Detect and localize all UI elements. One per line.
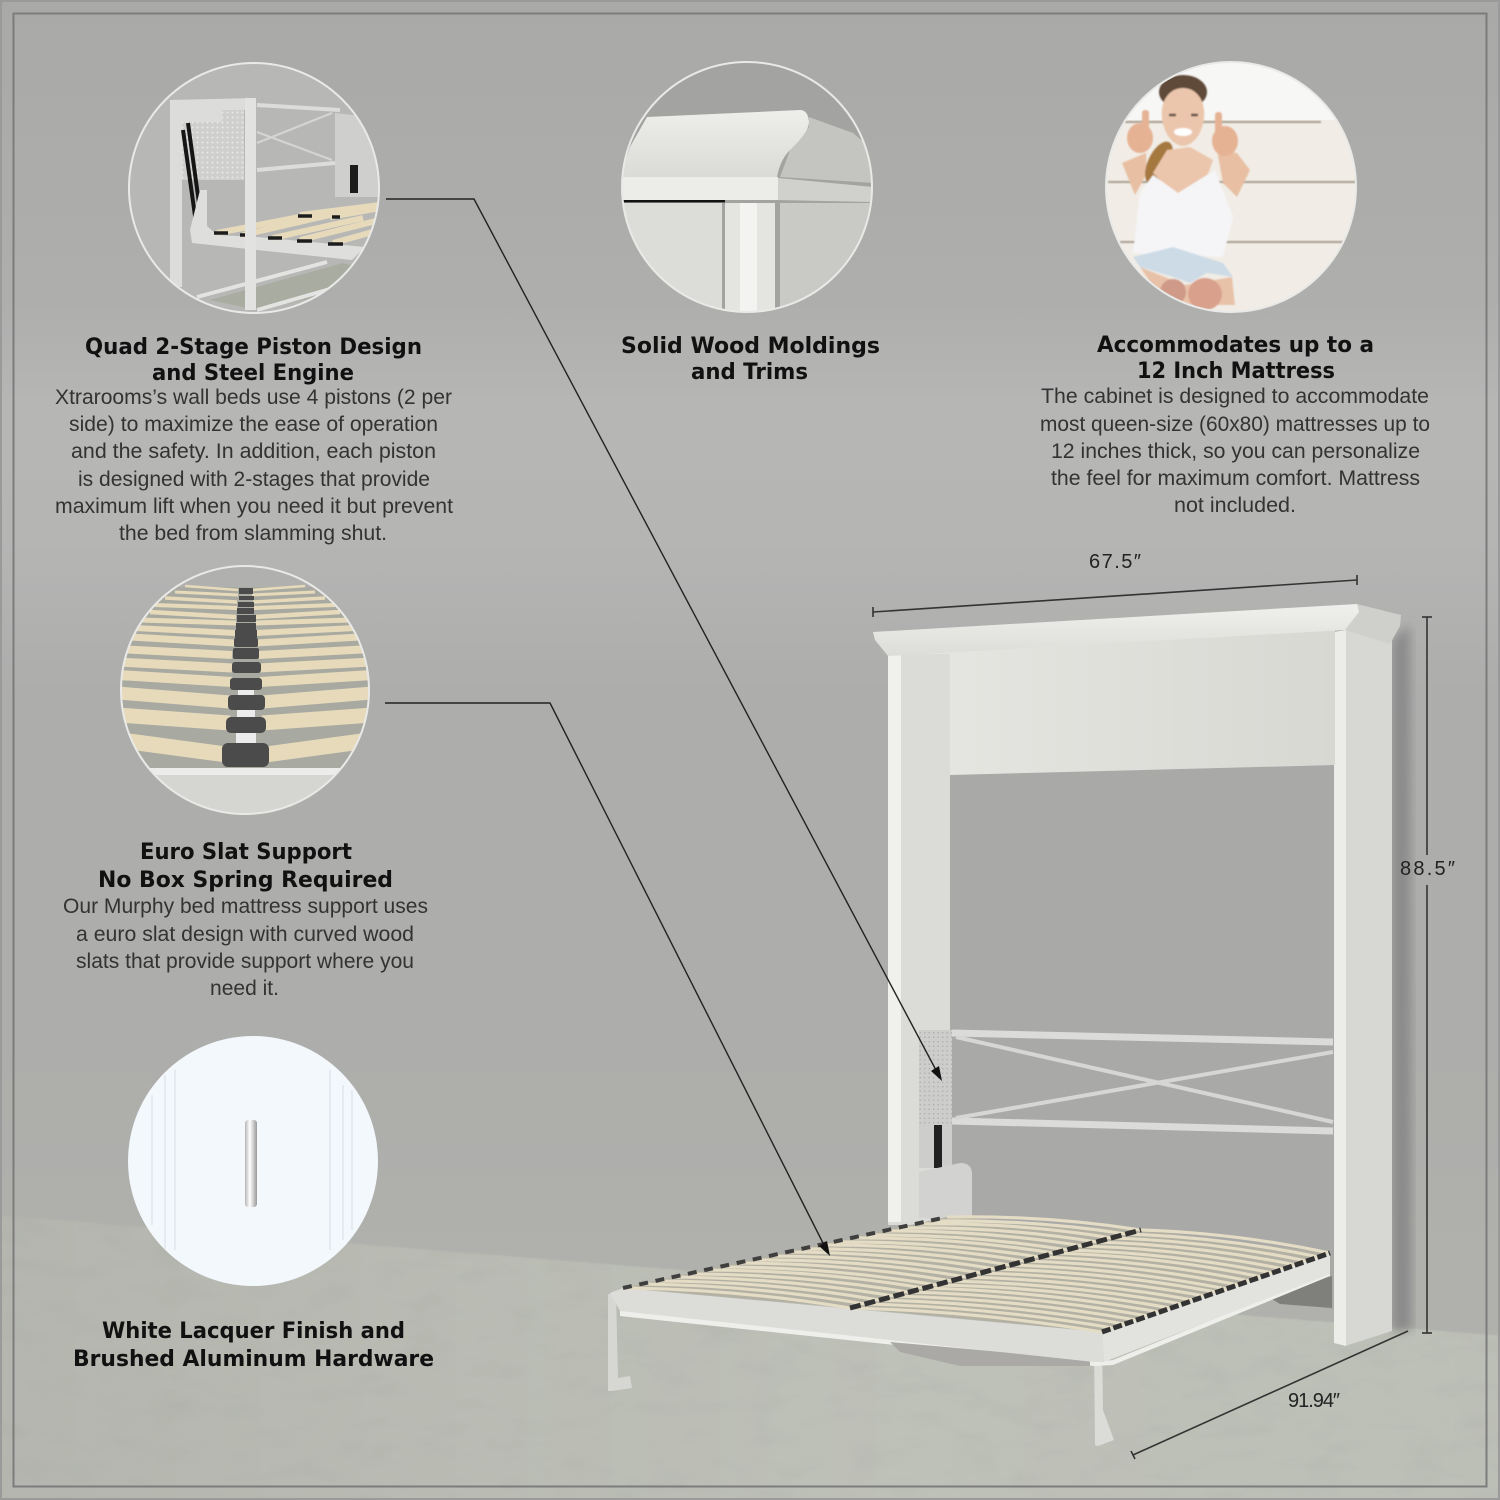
perforated bracket [919,1030,952,1124]
heading: and Steel Engine [152,361,354,386]
feature text: euro slats [63,840,428,1000]
floor [210,263,357,310]
cabinet header panel [900,630,1335,775]
perforated plate [182,110,244,180]
door panel [620,203,722,313]
heading: Euro Slat Support [140,840,352,865]
wood slats [623,1217,1330,1332]
cabinet shadow on wall [1392,625,1412,1332]
murphy bed illustration [608,604,1412,1446]
arms [1122,150,1250,197]
pilaster [725,203,775,313]
cabinet right pilaster [1334,630,1346,1346]
feature text: mattress [1040,333,1430,517]
description: is designed with 2-stages that provide [78,468,430,491]
top wall band [178,567,312,587]
crown front [620,110,809,177]
clips [214,216,343,244]
shorts [1133,247,1233,283]
description: a euro slat design with curved wood [76,923,414,946]
left fist and thumb [1127,110,1153,153]
front rail [610,1288,1104,1362]
circle ring 2 [622,62,872,312]
bed frame [190,190,365,260]
crown side [780,117,873,183]
heading: Quad 2-Stage Piston Design [85,335,422,360]
under frame [890,1342,1090,1366]
rails and braces [257,105,340,170]
right slats [252,586,372,755]
cabinet right side panel [1345,628,1392,1346]
eyes and smile [1169,114,1198,116]
slats [217,205,380,243]
feature heading: moldings: Solid Wood Moldings [621,334,880,359]
frame top plate [170,98,245,287]
shadow line [620,200,725,202]
feature heading: moldings: and Trims [691,360,808,385]
heading: No Box Spring Required [98,868,393,893]
side rail [1102,1253,1330,1362]
right leg [1094,1340,1114,1446]
right bracket [335,113,378,197]
circle photo: woman on mattress [1100,60,1362,312]
door grooves [152,1070,352,1250]
gas piston [919,1124,952,1168]
circle photo: white lacquer door with handle [128,1036,378,1286]
heading: Accommodates up to a [1097,333,1374,358]
description: not included. [1174,494,1296,517]
centre slat clips [850,1230,1141,1308]
slat deck base [623,1217,1330,1332]
feature heading: lacquer finish: Brushed Aluminum Hardware [73,1347,434,1372]
description: and the safety. In addition, each piston [71,440,436,463]
circle ring 4 [121,566,369,814]
circle ring 3 [1106,62,1356,312]
callout leader 1 with arrow [386,199,942,1081]
feature text: piston design [55,335,453,545]
hair [1159,75,1207,109]
woman figure [1122,75,1250,310]
description: The cabinet is designed to accommodate [1041,385,1429,408]
dimension label: depth: 91.94″ [1288,1390,1340,1412]
room background: floor [0,1213,1500,1500]
band front [620,177,778,200]
feature heading: lacquer finish: White Lacquer Finish and [102,1319,405,1344]
white top [1133,170,1233,257]
cabinet opening back wall [945,765,1336,1310]
dimension label: width: 67.5″ [1089,551,1141,573]
circle photo: crown molding [623,102,871,311]
left pistons [181,122,200,218]
bottom edge [620,1272,1330,1366]
band side [778,178,873,202]
base frame [120,768,370,818]
side panel [780,203,870,306]
description: side) to maximize the ease of operation [69,413,438,436]
dark area under bed [1262,1276,1332,1308]
mattress seams [1108,122,1362,242]
lower rail [952,1121,1333,1131]
face and chest [1153,88,1213,195]
centre clips [222,588,269,767]
crown molding front [873,604,1359,656]
right pistons [350,165,358,193]
left leg [608,1294,632,1391]
description: most queen-size (60x80) mattresses up to [1040,413,1430,436]
brushed aluminium handle [245,1120,257,1207]
description: 12 inches thick, so you can personalize [1051,440,1420,463]
description: need it. [210,977,279,1000]
left slat clips [623,1217,947,1288]
description: slats that provide support where you [76,950,414,973]
description: Xtrarooms’s wall beds use 4 pistons (2 per [55,386,452,409]
cross braces [956,1037,1333,1122]
dimension label: height: 88.5″ [1400,858,1455,880]
circle photo: piston mechanism [129,63,380,313]
circle ring 1 [129,63,379,313]
pillow [1127,63,1335,120]
left slats [118,586,238,755]
dimension line: width [873,575,1357,617]
cabinet left column [888,650,950,1225]
heading: 12 Inch Mattress [1137,359,1335,384]
floor rails [197,262,337,310]
braid [1144,140,1174,182]
upper rail [952,1033,1333,1042]
crown molding side [1345,604,1401,644]
right fist and thumb [1212,112,1238,156]
callout leader 2 with arrow [385,703,830,1256]
dimension line: depth [1131,1331,1408,1459]
description: maximum lift when you need it but prevent [55,495,453,518]
circle photo: euro slats [122,584,368,813]
description: the feel for maximum comfort. Mattress [1051,467,1420,490]
centre post [245,98,256,310]
dimension line: height [1422,617,1432,1333]
cabinet left pilaster [888,652,901,1222]
right slat clips [1102,1253,1330,1332]
legs and feet [1140,267,1235,305]
floor mottling [0,1215,1500,1500]
description: the bed from slamming shut. [119,522,387,545]
bed frame [608,1217,1330,1446]
pivot plate [919,1163,972,1218]
description: Our Murphy bed mattress support uses [63,895,428,918]
headboard frame rails [919,1030,1333,1218]
centre white gaps [236,690,256,743]
